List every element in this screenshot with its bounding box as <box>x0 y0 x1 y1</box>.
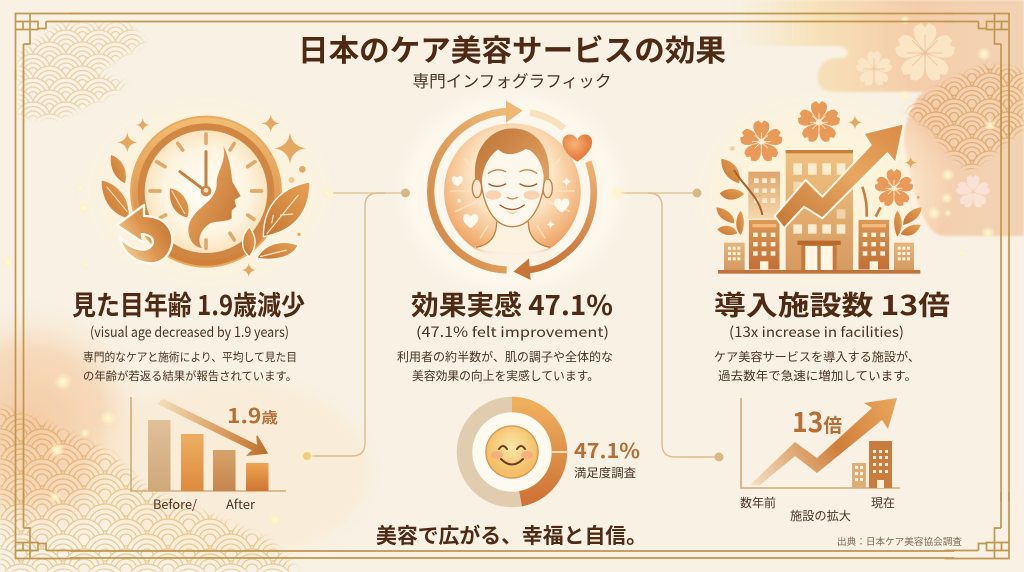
axis labels: Before/ <box>153 494 197 513</box>
face <box>481 147 545 227</box>
panel: visual age <box>72 114 310 513</box>
arrow: decline <box>159 400 267 455</box>
sparkles <box>730 115 920 199</box>
face silhouette <box>188 146 241 248</box>
cycle arrows <box>431 111 508 270</box>
hearts and sparkles <box>452 176 572 229</box>
growth chart <box>740 398 900 524</box>
bar chart: before and after <box>131 397 286 513</box>
description: の年齢が若返る結果が報告されています。 <box>83 368 297 384</box>
bar chart: before and after: After <box>226 494 255 513</box>
description: ケア美容サービスを導入する施設が、 <box>714 348 920 365</box>
arrow: growth <box>750 398 897 485</box>
description: 専門的なケアと施術により、平均して見た目 <box>83 349 297 365</box>
growth chart: 施設の拡大 <box>790 507 851 524</box>
panel: felt improvement <box>397 101 640 499</box>
icon: small buildings <box>852 441 892 488</box>
description: 利用者の約半数が、肌の調子や全体的な <box>397 348 613 365</box>
connector lines <box>299 185 724 464</box>
english subheading: (13x increase in facilities) <box>729 322 904 342</box>
front right building <box>858 219 890 270</box>
heading: felt improvement: 効果実感 47.1% <box>411 284 613 323</box>
english subheading: (47.1% felt improvement) <box>416 322 609 342</box>
donut value: 47.1% <box>574 435 640 464</box>
icon: smiling face in cycle <box>431 101 594 280</box>
return arrow <box>117 205 172 263</box>
axis labels: 数年前 <box>740 494 776 511</box>
source note: 出典：日本ケア美容協会調査 <box>837 534 962 548</box>
large leaves <box>263 182 310 237</box>
ears <box>472 179 482 198</box>
heading: facilities: 導入施設数 13倍 <box>714 284 950 323</box>
description: 美容効果の向上を実感しています。 <box>412 367 599 384</box>
value label: 1.9 歳 <box>227 400 279 429</box>
icon: buildings and rising arrow <box>716 101 922 274</box>
neck and hair back <box>475 218 551 253</box>
title: 日本のケア美容サービスの効果 <box>298 26 726 70</box>
english subheading: (visual age decreased by 1.9 years) <box>90 322 289 342</box>
sakura flowers <box>739 101 915 208</box>
small buildings <box>724 243 914 270</box>
plants <box>716 159 922 237</box>
icon: smiley <box>486 426 538 478</box>
value label: 13倍 <box>792 401 842 440</box>
panel: facilities <box>714 101 950 524</box>
icon: clock with face and leaves <box>102 114 310 277</box>
tagline: 美容で広がる、幸福と自信。 <box>376 520 647 550</box>
growth chart: 現在 <box>871 494 895 511</box>
front left building <box>748 219 780 270</box>
hair <box>475 128 549 182</box>
description: 過去数年で急速に増加しています。 <box>718 367 917 384</box>
donut chart: satisfaction <box>464 404 640 500</box>
subtitle: 専門インフォグラフィック <box>412 68 612 92</box>
donut caption: 満足度調査 <box>574 464 636 481</box>
heading: visual age: 見た目年齢 1.9歳減少 <box>72 284 305 323</box>
sparkles <box>117 114 306 277</box>
rising arrow <box>775 123 904 228</box>
